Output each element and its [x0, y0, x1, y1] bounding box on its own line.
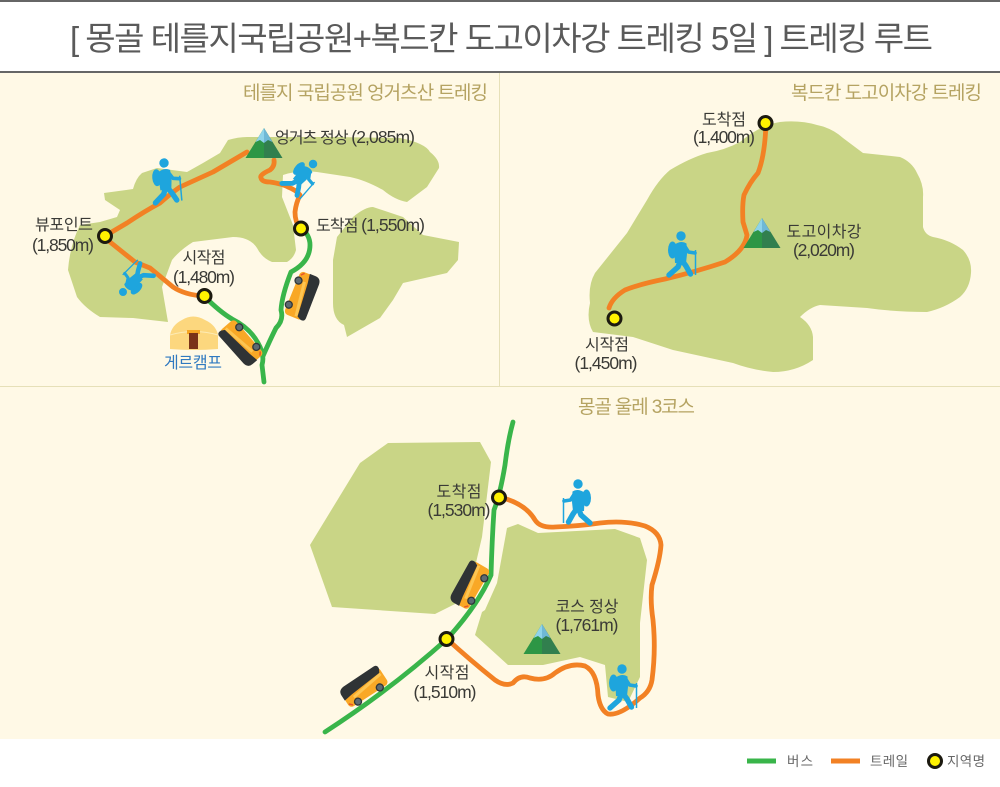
- icon: hiker: [564, 479, 591, 523]
- label: start: 시작점: [424, 664, 470, 682]
- icon: descending hiker: [111, 260, 154, 303]
- icon: hiker: [151, 157, 182, 203]
- trail route: [447, 497, 661, 714]
- location dot: finish: [759, 116, 772, 130]
- label: start: [173, 249, 235, 287]
- legend: place name: 지역명: [947, 754, 985, 769]
- icon: climbing hiker: [281, 153, 326, 199]
- location dot: viewpoint: [98, 230, 112, 242]
- label: viewpoint: [32, 216, 94, 255]
- icon: bus: [448, 559, 492, 612]
- label: Dogoi Chagang: (2,020m): [793, 240, 855, 260]
- panel: Terelj national park: [32, 82, 488, 382]
- trail route: [105, 152, 300, 296]
- land: east area: [475, 524, 647, 702]
- icon: hiker: [609, 664, 636, 708]
- legend: bus: 버스: [787, 754, 813, 769]
- label: start: (1,480m): [173, 267, 235, 287]
- label: finish: [428, 483, 490, 520]
- title: [ 몽골 테를지국립공원+복드칸 도고이차강 트레킹 5일 ] 트레킹 루트: [70, 20, 933, 57]
- legend: [747, 754, 985, 769]
- bus route: [325, 422, 513, 732]
- location dot: start: [608, 312, 621, 325]
- land: Bogd Khan area: [589, 121, 971, 372]
- label: start: [574, 336, 638, 373]
- icon: mountain: [744, 218, 780, 248]
- location dot: start: [440, 632, 453, 646]
- panel heading: 복드칸 도고이차강 트레킹: [791, 82, 982, 104]
- land: main area: [68, 137, 439, 322]
- icon: bus: [338, 664, 390, 710]
- land: west area: [310, 442, 491, 614]
- label: viewpoint: (1,850m): [32, 235, 94, 255]
- icon: bus: [217, 317, 266, 369]
- label: ger camp: 게르캠프: [164, 354, 222, 372]
- label: finish: 도착점 (1,550m): [316, 215, 425, 235]
- label: start: 시작점: [585, 336, 629, 354]
- label: finish: 도착점: [702, 111, 746, 129]
- label: finish: 도착점: [436, 483, 482, 501]
- legend: place name: [928, 754, 985, 769]
- location dot: finish: [294, 222, 308, 235]
- legend: bus: [747, 754, 813, 769]
- panel: Mongol Olle course 3: [310, 396, 695, 732]
- legend: trail: [831, 754, 908, 769]
- label: start: 시작점: [182, 249, 226, 267]
- label: start: [414, 664, 476, 702]
- label: course summit: 코스 정상: [556, 598, 619, 616]
- location dot: start: [198, 290, 211, 302]
- location dot: finish: [492, 491, 506, 504]
- label: Dogoi Chagang: [786, 223, 862, 260]
- trail route: [609, 123, 766, 308]
- panel: Bogd Khan: [574, 82, 982, 373]
- label: Dogoi Chagang: 도고이차강: [786, 223, 862, 241]
- panel heading: 몽골 울레 3코스: [578, 396, 695, 418]
- panel heading: 테를지 국립공원 엉거츠산 트레킹: [243, 82, 488, 104]
- icon: mountain: [524, 624, 560, 654]
- land: east area: [333, 207, 459, 337]
- icon: bus: [282, 270, 322, 322]
- header top rule: [0, 0, 1000, 2]
- label: summit: 엉거츠 정상 (2,085m): [275, 127, 415, 147]
- label: start: (1,450m): [574, 353, 638, 373]
- label: finish: (1,530m): [428, 500, 490, 520]
- label: start: (1,510m): [414, 682, 476, 702]
- icon: mountain: [246, 128, 282, 158]
- label: finish: [693, 111, 755, 147]
- icon: hiker: [668, 231, 696, 275]
- bus route: [204, 228, 310, 382]
- label: finish: (1,400m): [693, 127, 755, 147]
- icon: ger: [170, 316, 218, 350]
- label: viewpoint: 뷰포인트: [35, 216, 93, 234]
- label: course summit: (1,761m): [556, 615, 618, 635]
- legend: trail: 트레일: [870, 754, 908, 769]
- label: course summit: [556, 598, 619, 635]
